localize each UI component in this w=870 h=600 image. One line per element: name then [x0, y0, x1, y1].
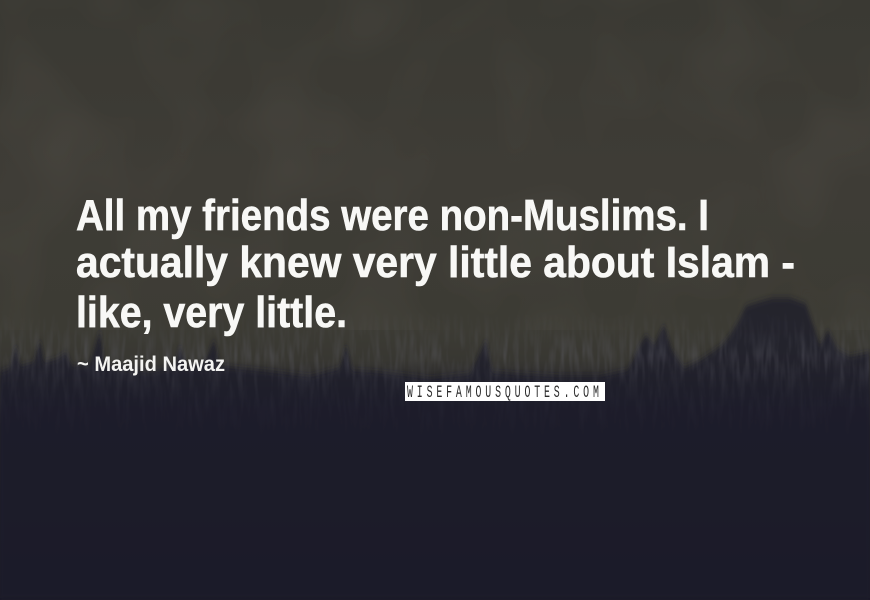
quote text: actually knew very little about Islam - [76, 238, 795, 287]
author attribution: ~ Maajid Nawaz [77, 353, 225, 376]
background: cloud texture [0, 0, 870, 330]
quote text [76, 191, 795, 337]
quote text: All my friends were non-Muslims. I [76, 191, 709, 240]
watermark badge: WISEFAMOUSQUOTES.COM [407, 383, 603, 403]
background: treeline silhouette [0, 296, 870, 394]
quote text: like, very little. [76, 288, 347, 337]
